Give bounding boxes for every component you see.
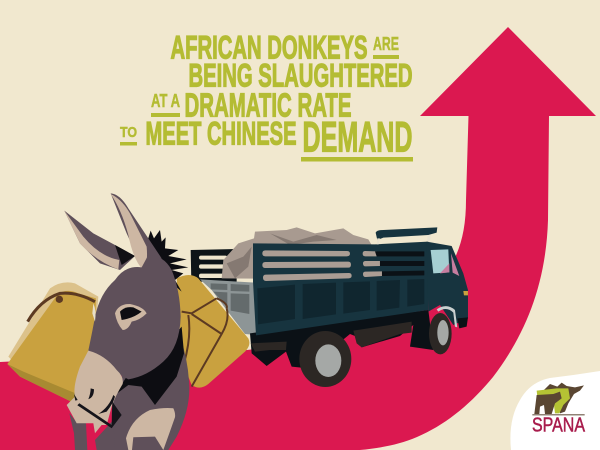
title: MEET CHINESE [146, 116, 296, 152]
truck rear black gate [191, 249, 237, 282]
mane [147, 230, 188, 292]
head [88, 255, 181, 379]
title: AFRICAN DONKEYS [170, 30, 368, 66]
logo wordmark: SPANA [532, 414, 585, 436]
neck and body [112, 337, 189, 450]
truck cargo load [222, 227, 380, 280]
muzzle and jaw [67, 351, 123, 433]
donkey with panniers [7, 193, 249, 450]
title: AT A [151, 90, 180, 111]
truck cargo side rails [253, 242, 428, 335]
bridle [77, 402, 122, 428]
far ear [64, 211, 135, 270]
near ear [111, 193, 162, 270]
truck roof rack [376, 227, 437, 240]
title: ARE [373, 33, 399, 54]
title: DEMAND [302, 114, 412, 162]
title: DRAMATIC RATE [184, 88, 352, 124]
title [120, 30, 413, 162]
far pannier [177, 275, 249, 388]
truck side panels [257, 279, 424, 324]
SPANA logo [510, 371, 600, 450]
legs [69, 413, 115, 450]
title: BEING SLAUGHTERED [188, 58, 412, 94]
truck [191, 227, 468, 387]
near pannier [7, 282, 98, 404]
logo white badge [510, 371, 600, 450]
truck cab [427, 242, 468, 328]
tailgate grey [200, 279, 256, 335]
title: TO [120, 125, 137, 141]
black neck patch [115, 327, 184, 405]
inner eye [115, 304, 147, 330]
chest [126, 408, 175, 450]
truck front wheel [429, 313, 452, 354]
logo camel and donkey [532, 383, 585, 415]
truck undercarriage [250, 310, 433, 368]
truck rear wheel [299, 331, 351, 387]
nostril and mouth [74, 388, 115, 414]
